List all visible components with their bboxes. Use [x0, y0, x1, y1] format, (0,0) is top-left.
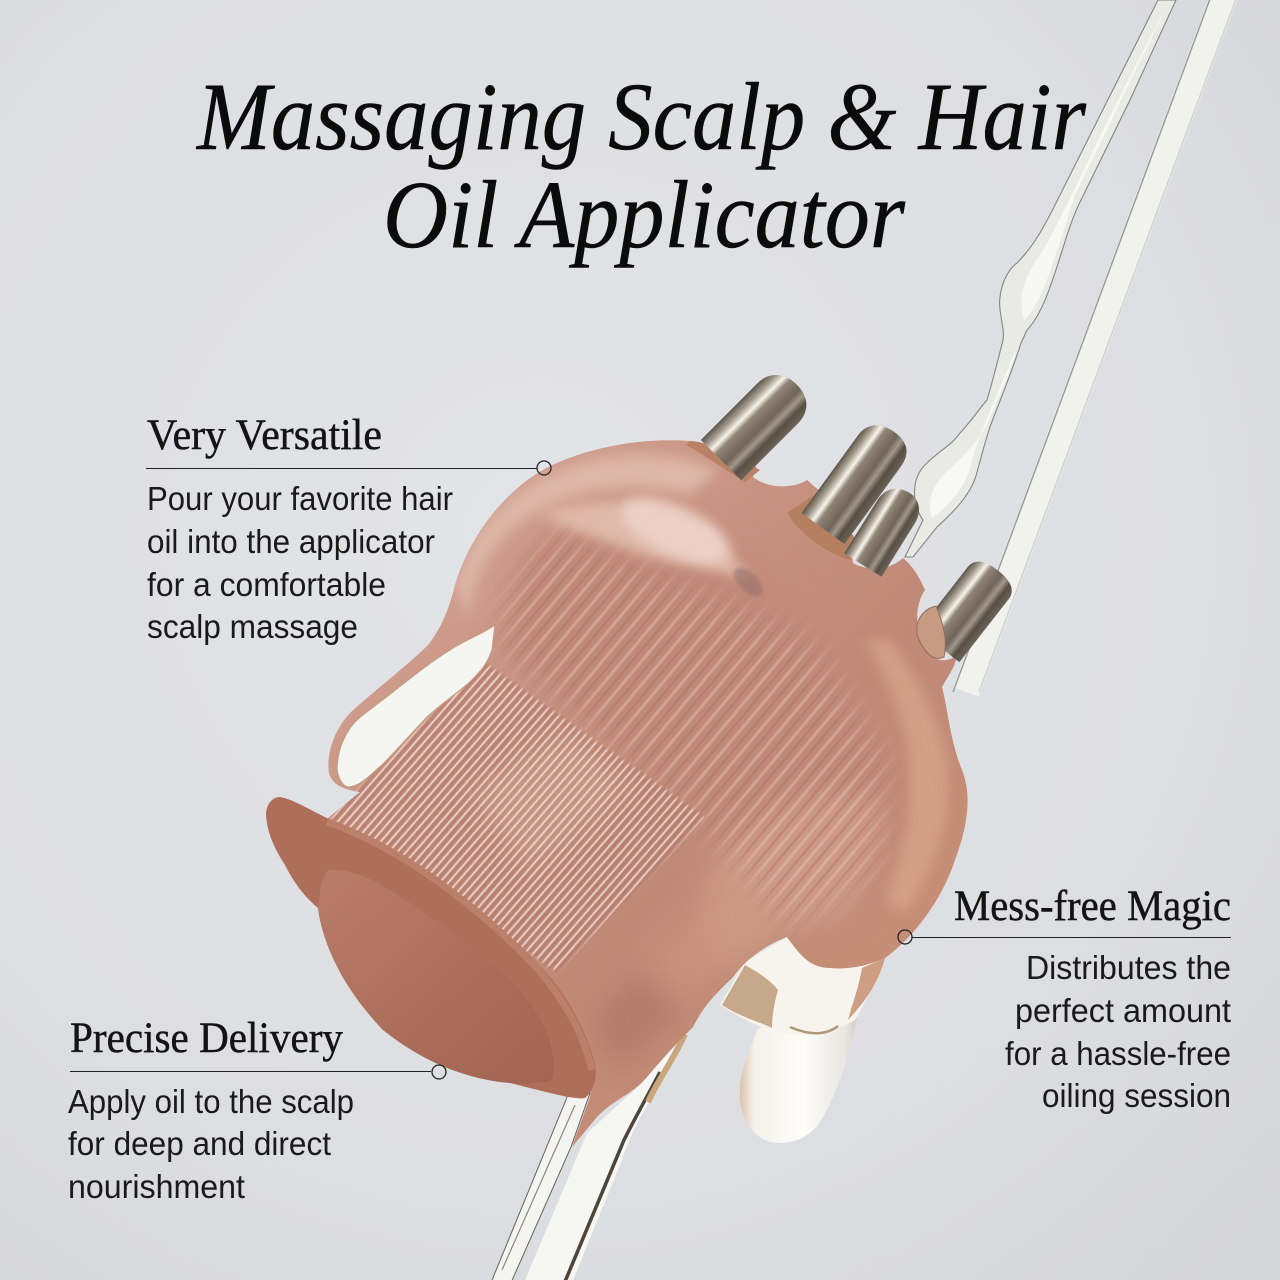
callout: Precise Delivery: Precise Delivery — [70, 1015, 343, 1062]
callout: Very Versatile: scalp massage — [147, 608, 358, 645]
callout: Mess-free Magic: Distributes the — [1026, 949, 1231, 986]
glass oil rods: bottom — [490, 1033, 687, 1280]
oil collars at tip bases — [686, 441, 760, 482]
callout: Very Versatile: for a comfortable — [147, 566, 386, 603]
callout: Precise Delivery: Apply oil to the scalp — [68, 1083, 354, 1120]
title: Oil Applicator — [383, 161, 906, 268]
title: Massaging Scalp & Hair — [195, 63, 1087, 170]
applicator — [266, 440, 968, 1147]
clear oil drip — [720, 935, 885, 1143]
callout: Mess-free Magic: Mess-free Magic — [954, 883, 1231, 930]
callout: Very Versatile: oil into the applicator — [147, 523, 435, 560]
tip 2 — [802, 416, 915, 544]
callout: Very Versatile — [146, 412, 551, 645]
flange and dome silhouette — [266, 797, 596, 1098]
callout: Precise Delivery: nourishment — [68, 1168, 245, 1205]
callout: Very Versatile: Very Versatile — [147, 412, 382, 459]
interior shading and ribs — [330, 450, 950, 1058]
thin oil stream with droplets — [905, 0, 1176, 557]
oil bead at tip 4 — [917, 606, 945, 658]
tip 1 — [701, 364, 817, 480]
massage tips — [686, 364, 1019, 662]
tip 4 — [918, 555, 1019, 662]
callout: Very Versatile: Pour your favorite hair — [147, 480, 453, 517]
callout: Mess-free Magic — [898, 883, 1231, 1114]
callout: Mess-free Magic: perfect amount — [1015, 992, 1231, 1029]
flange rim highlight — [327, 822, 592, 1070]
title — [195, 63, 1087, 268]
tip 3 — [844, 480, 927, 577]
oil-filled body — [328, 440, 968, 1147]
callout: Precise Delivery — [68, 1015, 446, 1205]
callout: Mess-free Magic: for a hassle-free — [1005, 1035, 1231, 1072]
upper ribbed band — [501, 538, 889, 920]
lower ribs — [330, 664, 706, 972]
sparkle patch — [618, 492, 734, 568]
callout: Mess-free Magic: oiling session — [1042, 1077, 1231, 1114]
glass oil rod: right — [953, 0, 1243, 692]
white window in left drip — [337, 625, 495, 787]
callout: Precise Delivery: for deep and direct — [68, 1125, 331, 1162]
dome — [318, 870, 553, 1084]
